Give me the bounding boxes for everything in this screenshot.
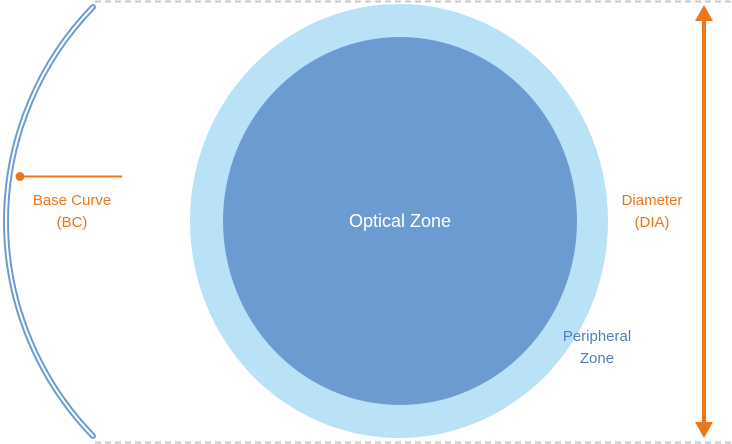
diameter label [622,192,682,231]
base curve marker [16,172,122,181]
peripheral zone label [563,328,631,367]
base curve arc [6,7,93,436]
base curve label: Base Curve [33,192,111,209]
peripheral zone label: Peripheral [563,328,631,345]
base curve label: (BC) [57,214,87,231]
diameter arrow [695,5,713,438]
peripheral zone circle [190,4,608,438]
peripheral zone label: Zone [580,350,614,367]
diameter label: (DIA) [634,214,670,231]
optical zone circle [223,37,577,405]
optical zone label: Optical Zone [349,211,451,231]
base curve label [33,192,111,231]
diameter label: Diameter [622,192,682,209]
